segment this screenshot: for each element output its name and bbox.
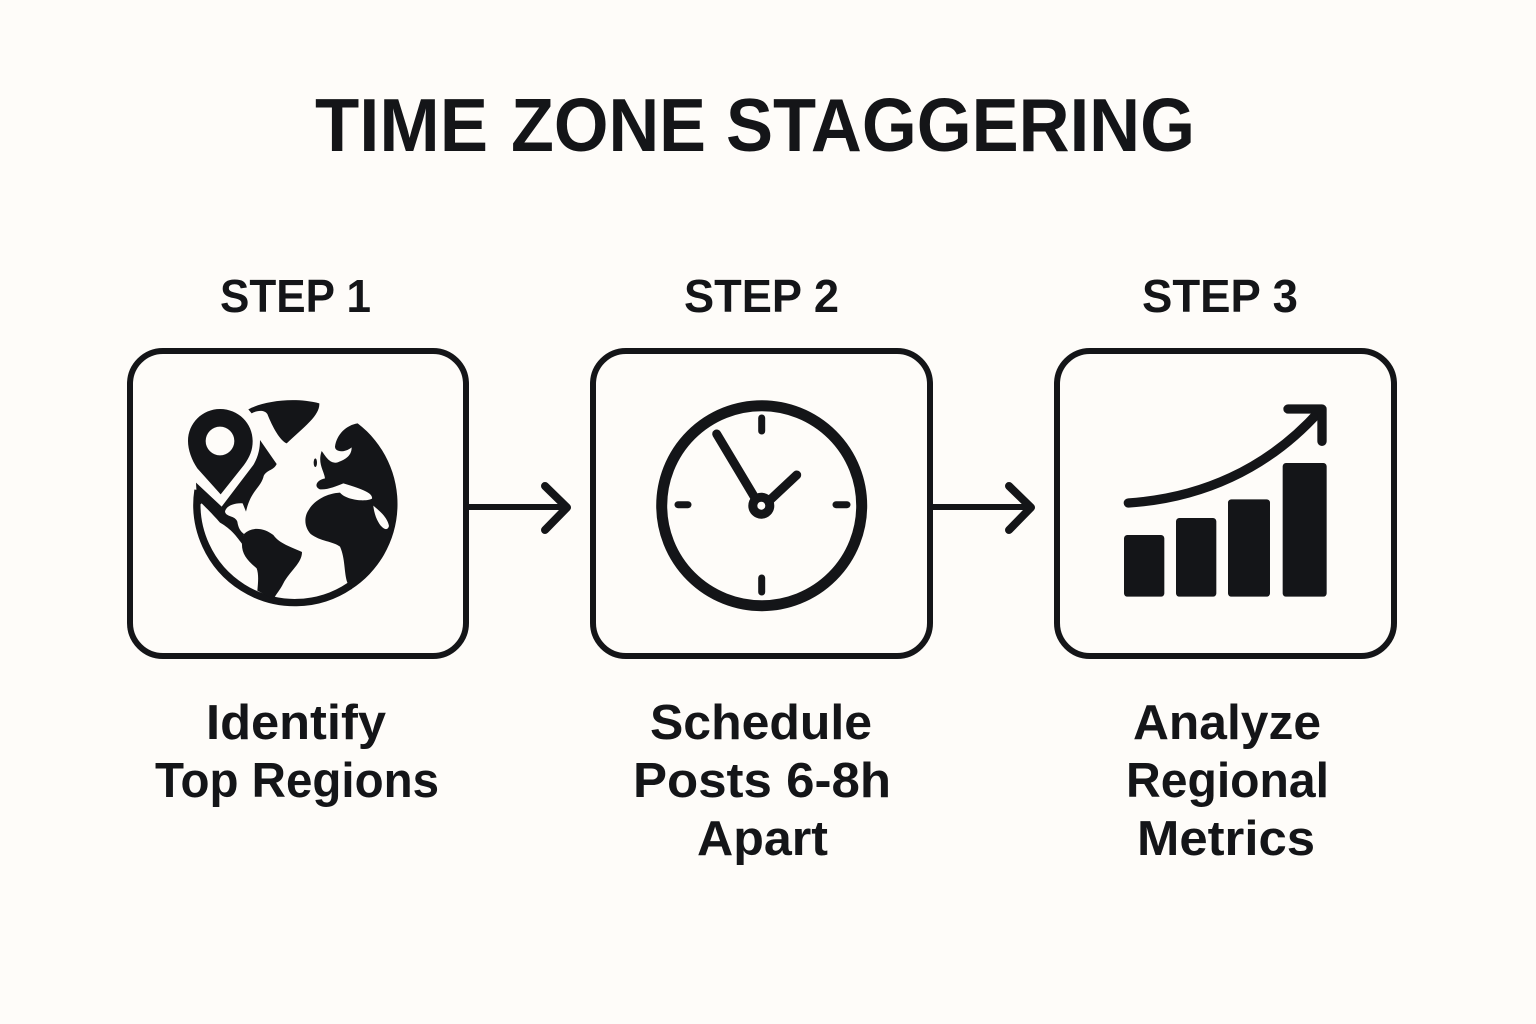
icon: rising bar chart (1124, 409, 1327, 597)
arrow: step 2 to step 3 (933, 486, 1031, 530)
globe outline (197, 490, 350, 603)
step 1 label: Identify (206, 696, 386, 750)
step 3 label: Metrics (1137, 812, 1315, 866)
step 3 label: Regional (1126, 754, 1329, 808)
step 2 box (593, 351, 930, 656)
panel: step 1 (130, 270, 466, 808)
step 3 label (1126, 696, 1329, 866)
step 2 label: Schedule (650, 696, 872, 750)
Greenland (248, 400, 319, 443)
title: TIME (315, 83, 488, 167)
step 1 label (155, 696, 439, 808)
location pin (188, 409, 253, 494)
step 2 label: Posts 6-8h (633, 754, 891, 808)
trend arrow (1128, 409, 1322, 503)
step 3 label: Analyze (1133, 696, 1321, 750)
small island (314, 458, 317, 467)
step 3 box (1057, 351, 1394, 656)
hub (753, 497, 770, 514)
step 2 label (633, 696, 891, 866)
step 3 heading: STEP 3 (1142, 270, 1298, 322)
hour ticks (678, 418, 847, 592)
icon: globe with location pin (188, 400, 398, 603)
Madagascar (373, 506, 389, 529)
icon: clock (662, 406, 862, 606)
panel: step 3 (1057, 270, 1394, 866)
hour hand (770, 475, 797, 500)
step 1 box (130, 351, 466, 656)
bars (1124, 463, 1327, 597)
arrow: step 1 to step 2 (469, 486, 567, 530)
title (315, 83, 1195, 167)
step 1 label: Top Regions (155, 754, 439, 808)
title: STAGGERING (726, 83, 1195, 167)
step 2 heading: STEP 2 (684, 270, 839, 322)
Eurasia and Africa (305, 423, 398, 590)
step 1 heading: STEP 1 (220, 270, 371, 322)
North and Central America (196, 440, 277, 545)
South America (242, 529, 302, 599)
clock face (662, 406, 862, 606)
title: ZONE (511, 83, 706, 167)
panel: step 2 (593, 270, 930, 866)
step 2 label: Apart (697, 812, 828, 866)
minute hand (717, 434, 755, 498)
